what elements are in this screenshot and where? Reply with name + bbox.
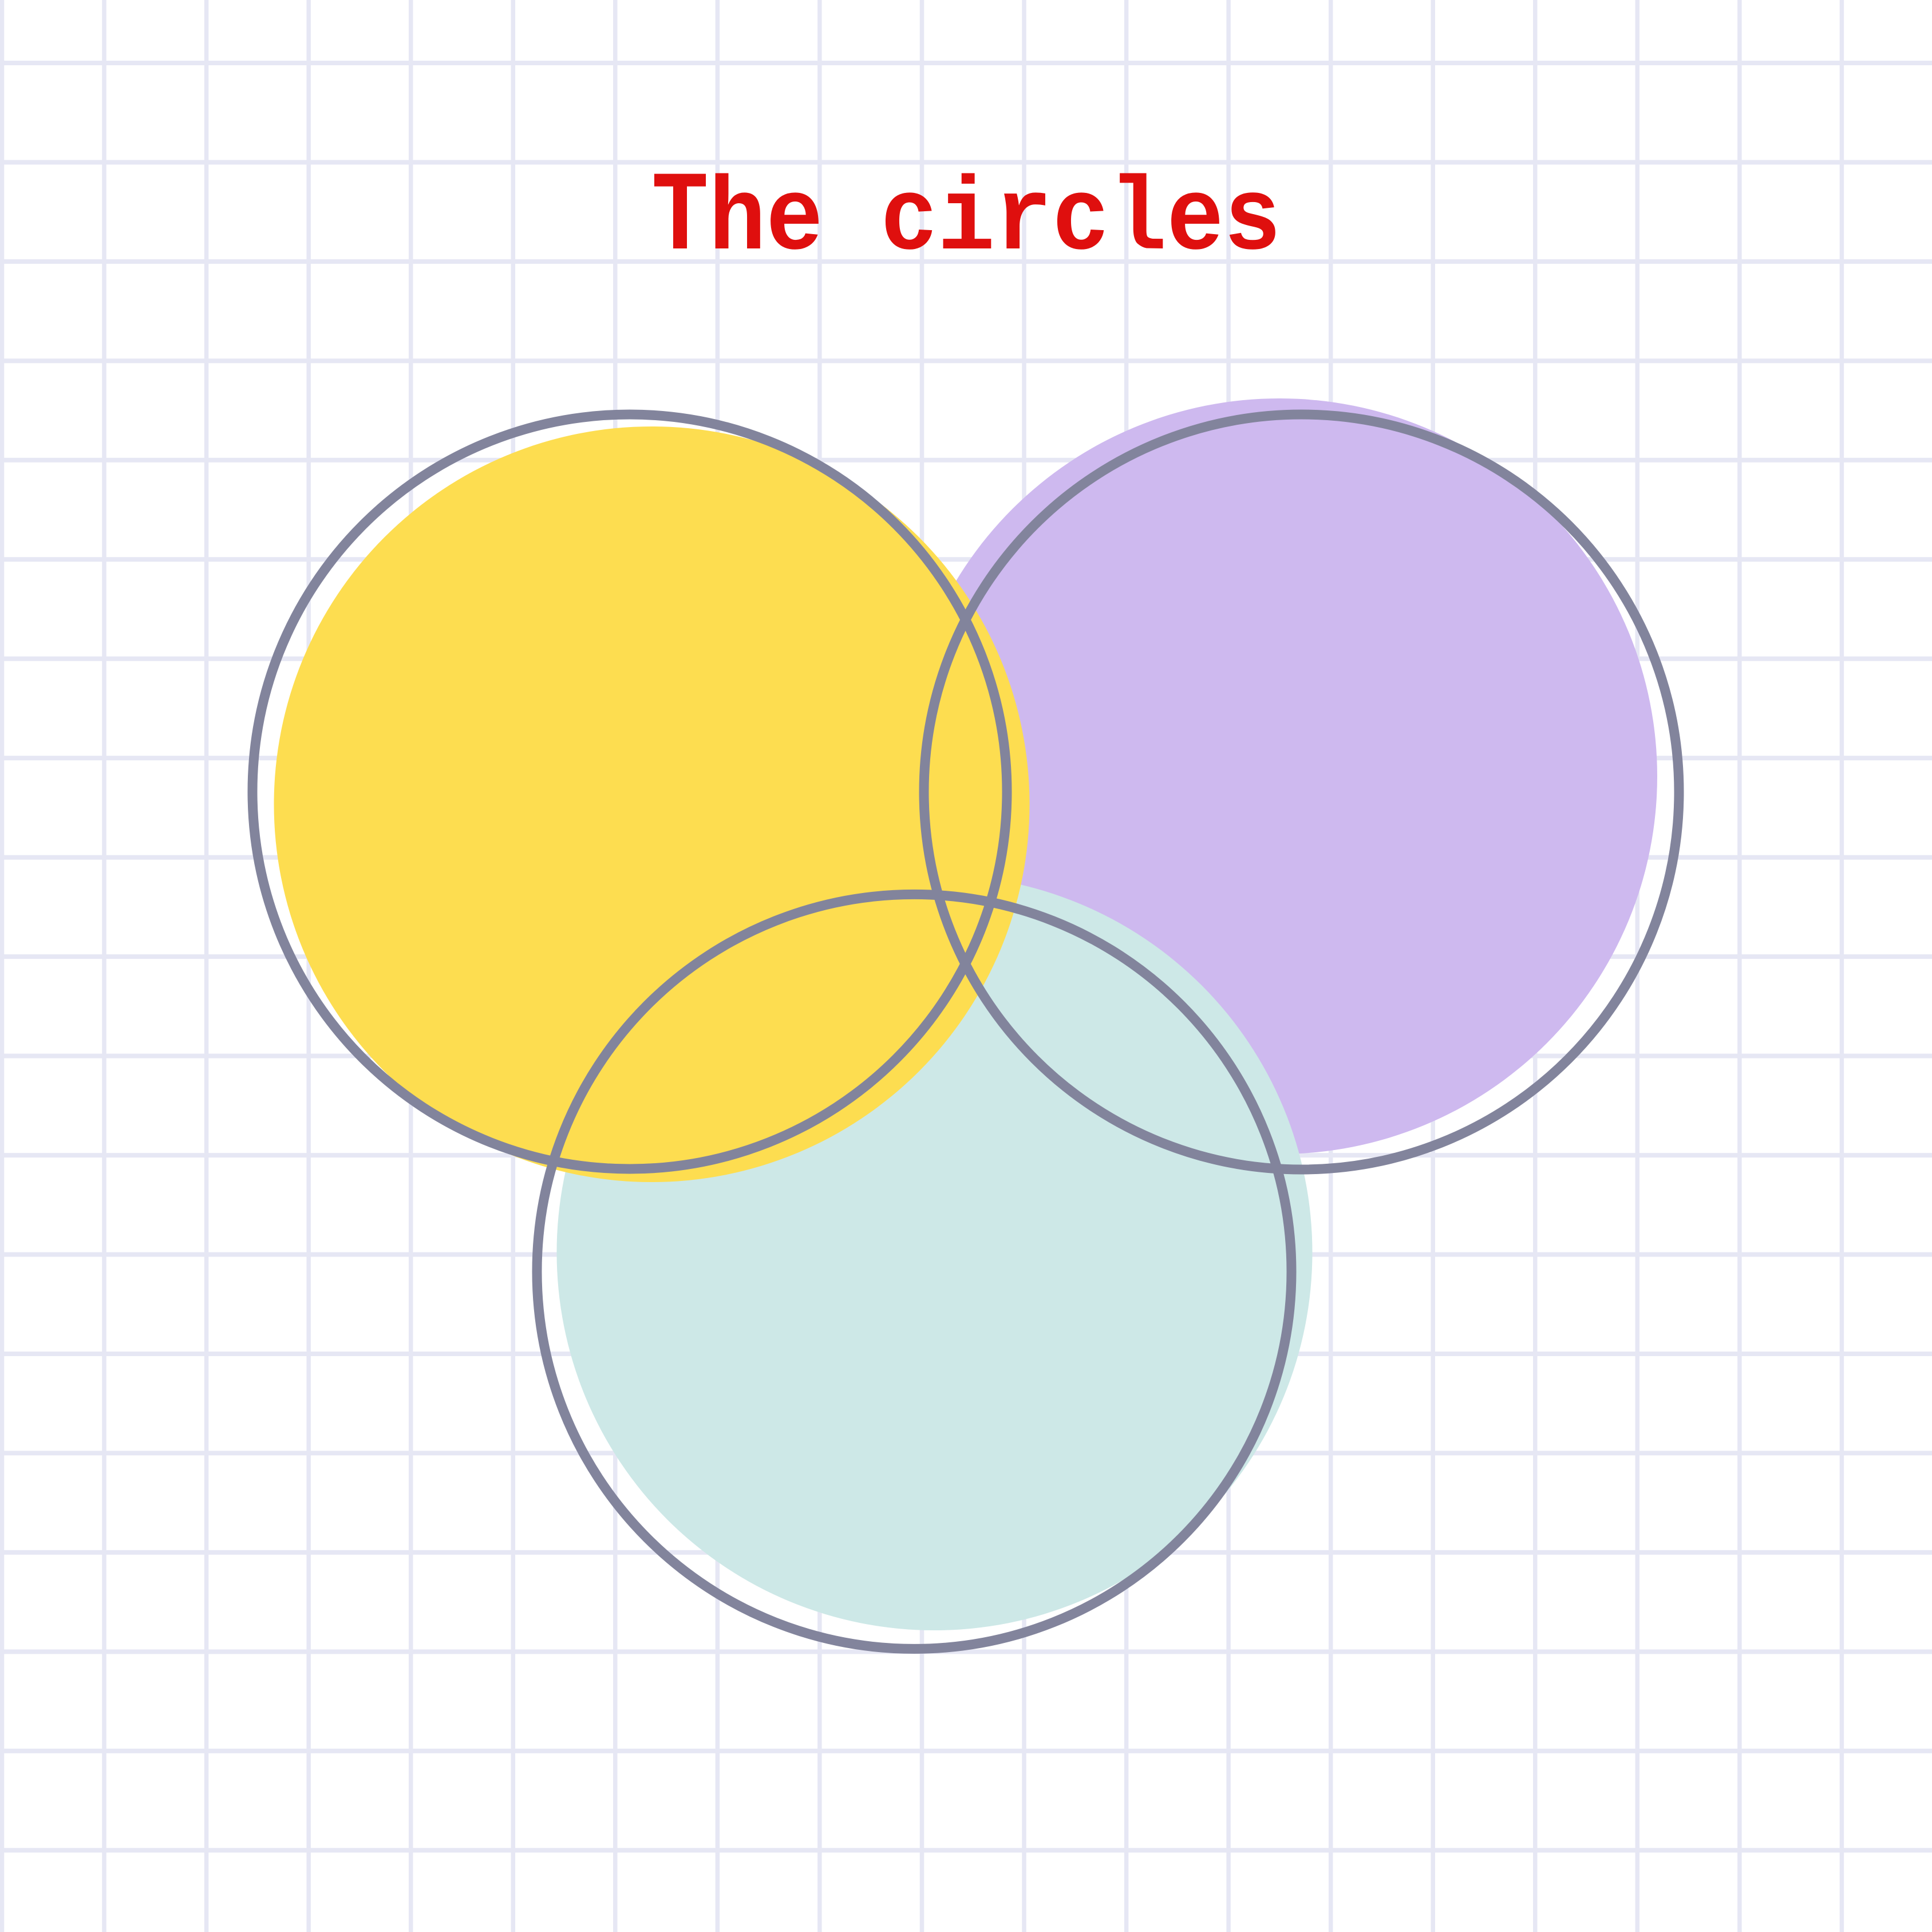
title: he circles bbox=[709, 163, 1281, 280]
outline circle: left bbox=[252, 414, 1007, 1169]
title: T bbox=[651, 155, 709, 283]
outline circle: bottom bbox=[537, 894, 1291, 1649]
filled circle: purple bbox=[902, 398, 1657, 1154]
filled circle: teal bbox=[556, 875, 1312, 1630]
filled circle: yellow bbox=[274, 426, 1029, 1182]
outline circle: right bbox=[924, 414, 1679, 1170]
